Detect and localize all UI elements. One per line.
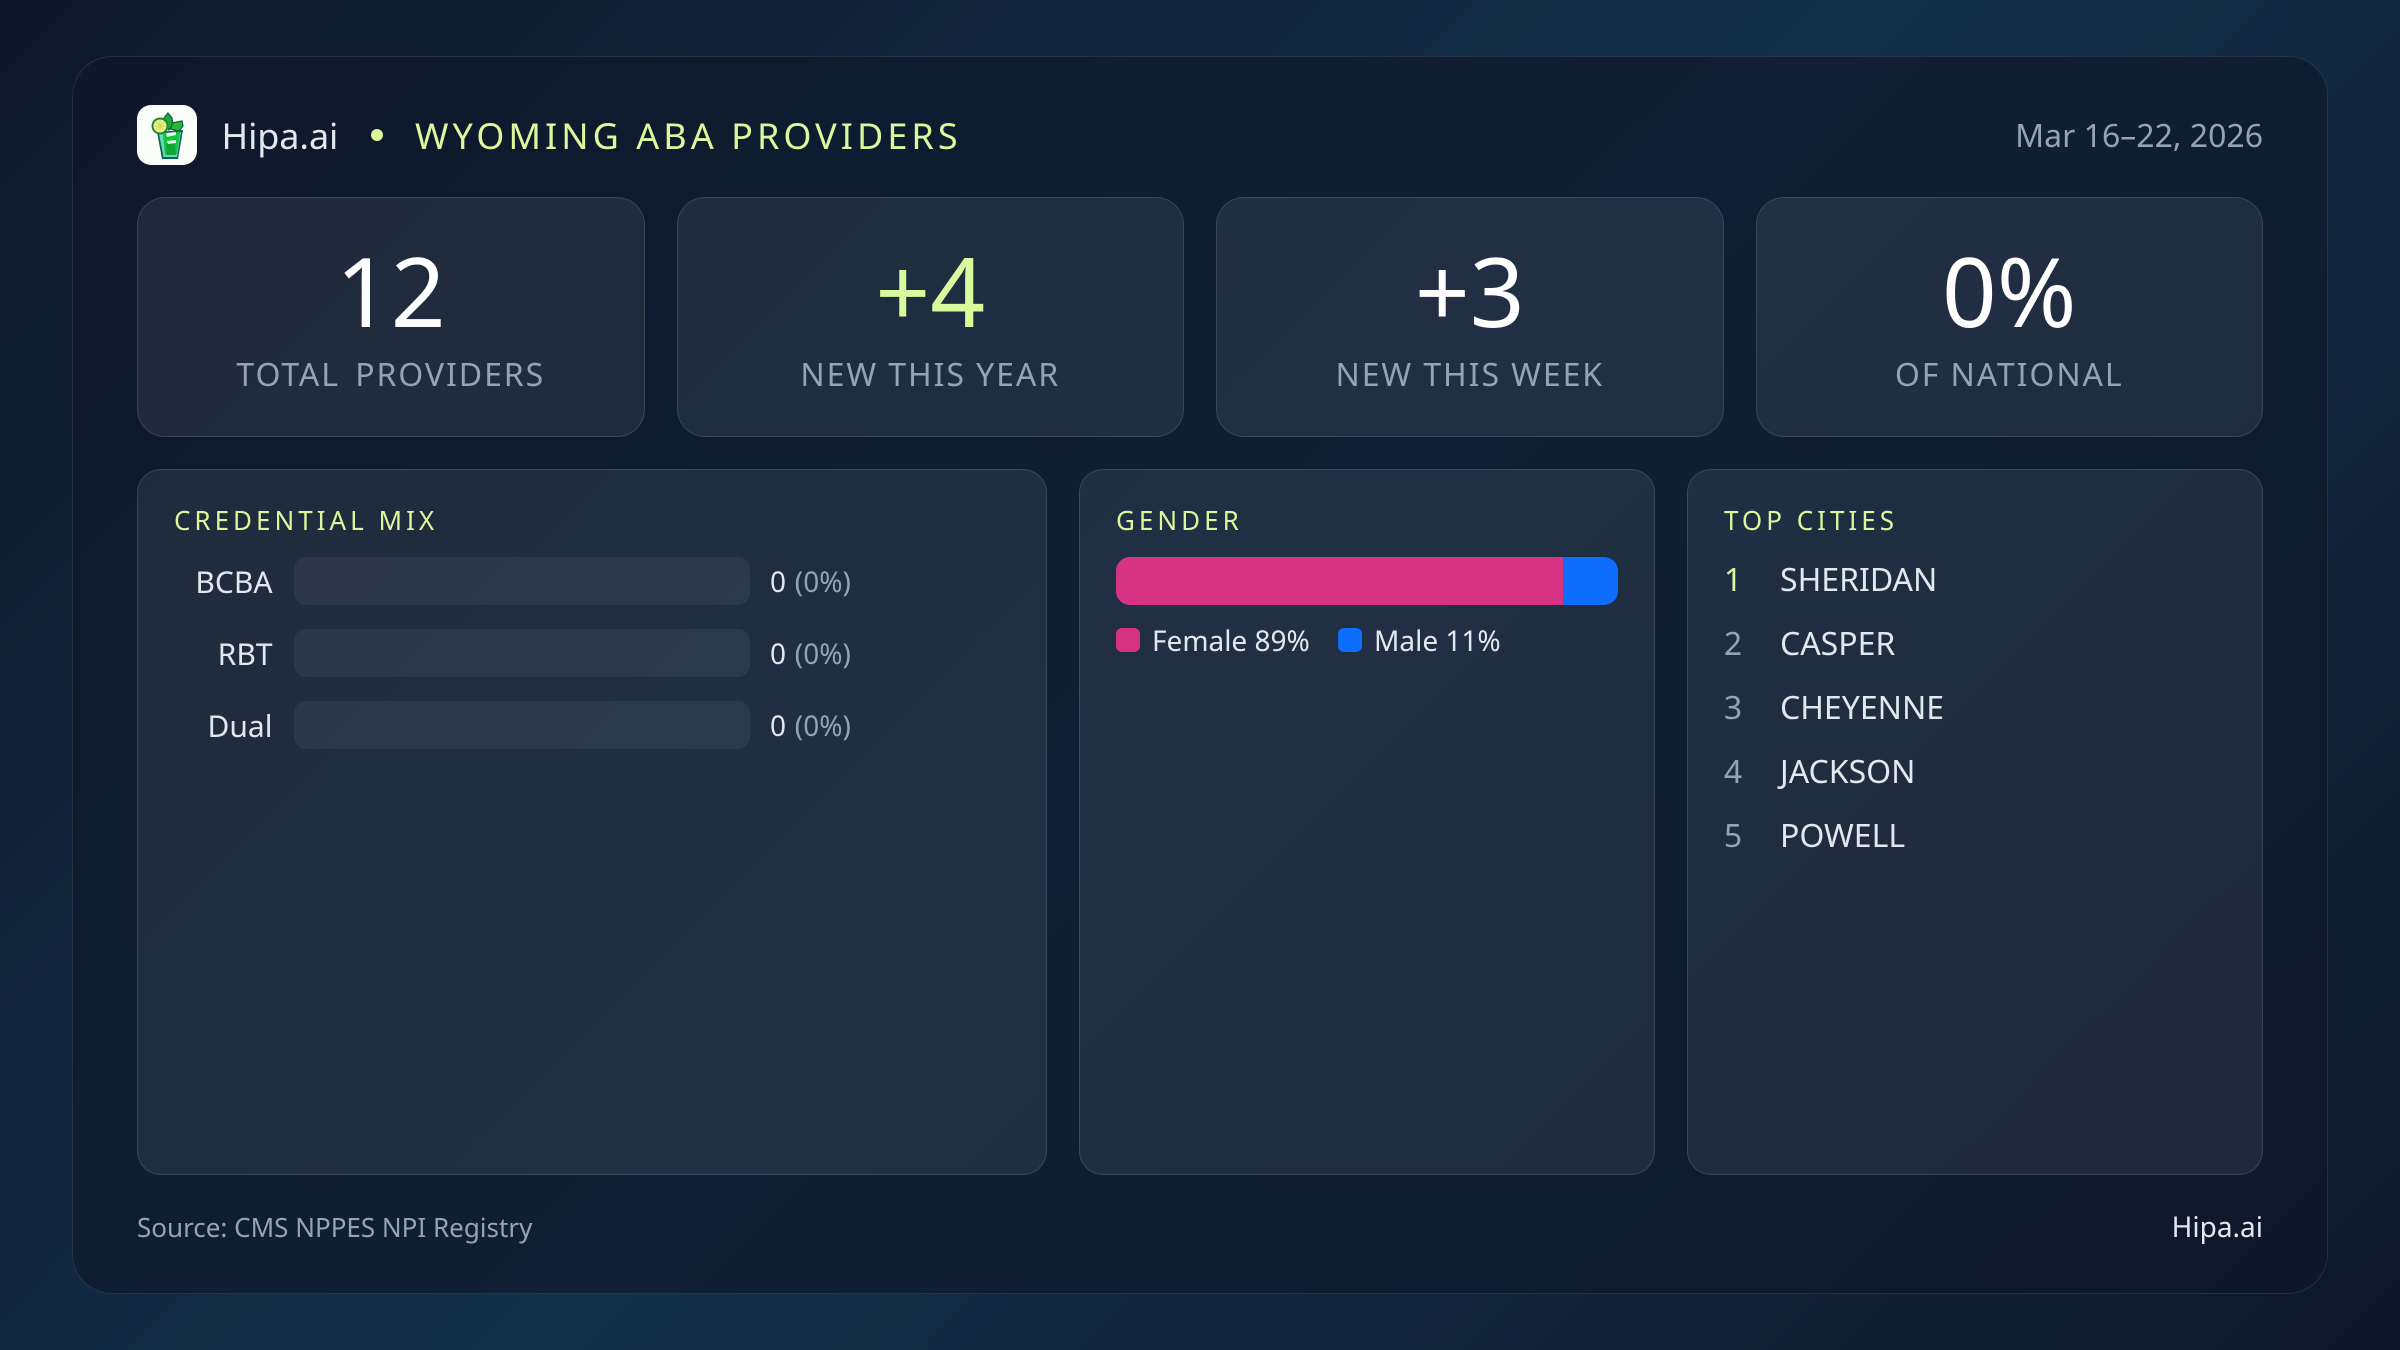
panel: top cities: POWELL bbox=[1780, 814, 1905, 857]
stat: of national bbox=[1756, 197, 2263, 437]
panel: credential mix: Dual bbox=[207, 704, 272, 746]
panel: top cities: JACKSON bbox=[1780, 750, 1915, 793]
gender stacked bar bbox=[1116, 557, 1618, 605]
stat: new this year: NEW THIS YEAR bbox=[800, 353, 1060, 396]
panel: credential mix: 0 (0%) bbox=[770, 563, 851, 601]
panel: top cities: 5 bbox=[1724, 814, 1742, 857]
header bbox=[137, 105, 2263, 165]
legend bbox=[1116, 622, 1501, 660]
stat: total providers: TOTAL PROVIDERS bbox=[236, 353, 545, 396]
panel: gender: GENDER bbox=[1116, 502, 1243, 538]
stat: of national: 0% bbox=[1942, 225, 2077, 356]
panel: credential mix bbox=[137, 469, 1047, 1175]
title: WYOMING ABA PROVIDERS bbox=[415, 110, 962, 160]
panel: top cities: 4 bbox=[1724, 750, 1742, 793]
stat: new this week bbox=[1216, 197, 1724, 437]
stat: new this week: NEW THIS WEEK bbox=[1335, 353, 1604, 396]
panel: credential mix: RBT bbox=[218, 632, 272, 674]
date range: Mar 16–22, 2026 bbox=[2015, 114, 2263, 156]
stat: of national: OF NATIONAL bbox=[1895, 353, 2124, 396]
panel: credential mix: 0 (0%) bbox=[770, 707, 851, 745]
panel: top cities bbox=[1687, 469, 2263, 1175]
panel: credential mix: 0 (0%) bbox=[770, 635, 851, 673]
stat: total providers: 12 bbox=[336, 225, 446, 356]
separator dot bbox=[371, 129, 383, 141]
stat: new this year: +4 bbox=[875, 225, 985, 356]
stat: new this week: +3 bbox=[1415, 225, 1525, 356]
stat: total providers bbox=[137, 197, 644, 437]
stat: new this year bbox=[676, 197, 1184, 437]
legend: Female 89% bbox=[1152, 622, 1310, 660]
panel: top cities: 1 bbox=[1724, 558, 1742, 601]
footer source: Source: CMS NPPES NPI Registry bbox=[137, 1209, 532, 1245]
icon: mojito glass logo bbox=[137, 105, 197, 165]
footer brand: Hipa.ai bbox=[2172, 1208, 2263, 1246]
panel: top cities: SHERIDAN bbox=[1780, 558, 1937, 601]
panel: top cities: TOP CITIES bbox=[1724, 502, 1898, 538]
panel: top cities: 3 bbox=[1724, 686, 1742, 729]
brand name: Hipa.ai bbox=[222, 110, 338, 160]
legend: Male 11% bbox=[1374, 622, 1501, 660]
panel: gender bbox=[1079, 469, 1655, 1175]
panel: top cities: CHEYENNE bbox=[1780, 686, 1944, 729]
panel: top cities: CASPER bbox=[1780, 622, 1895, 665]
panel: top cities: 2 bbox=[1724, 622, 1742, 665]
panel: credential mix: CREDENTIAL MIX bbox=[174, 502, 438, 538]
panel: credential mix: BCBA bbox=[195, 560, 272, 602]
